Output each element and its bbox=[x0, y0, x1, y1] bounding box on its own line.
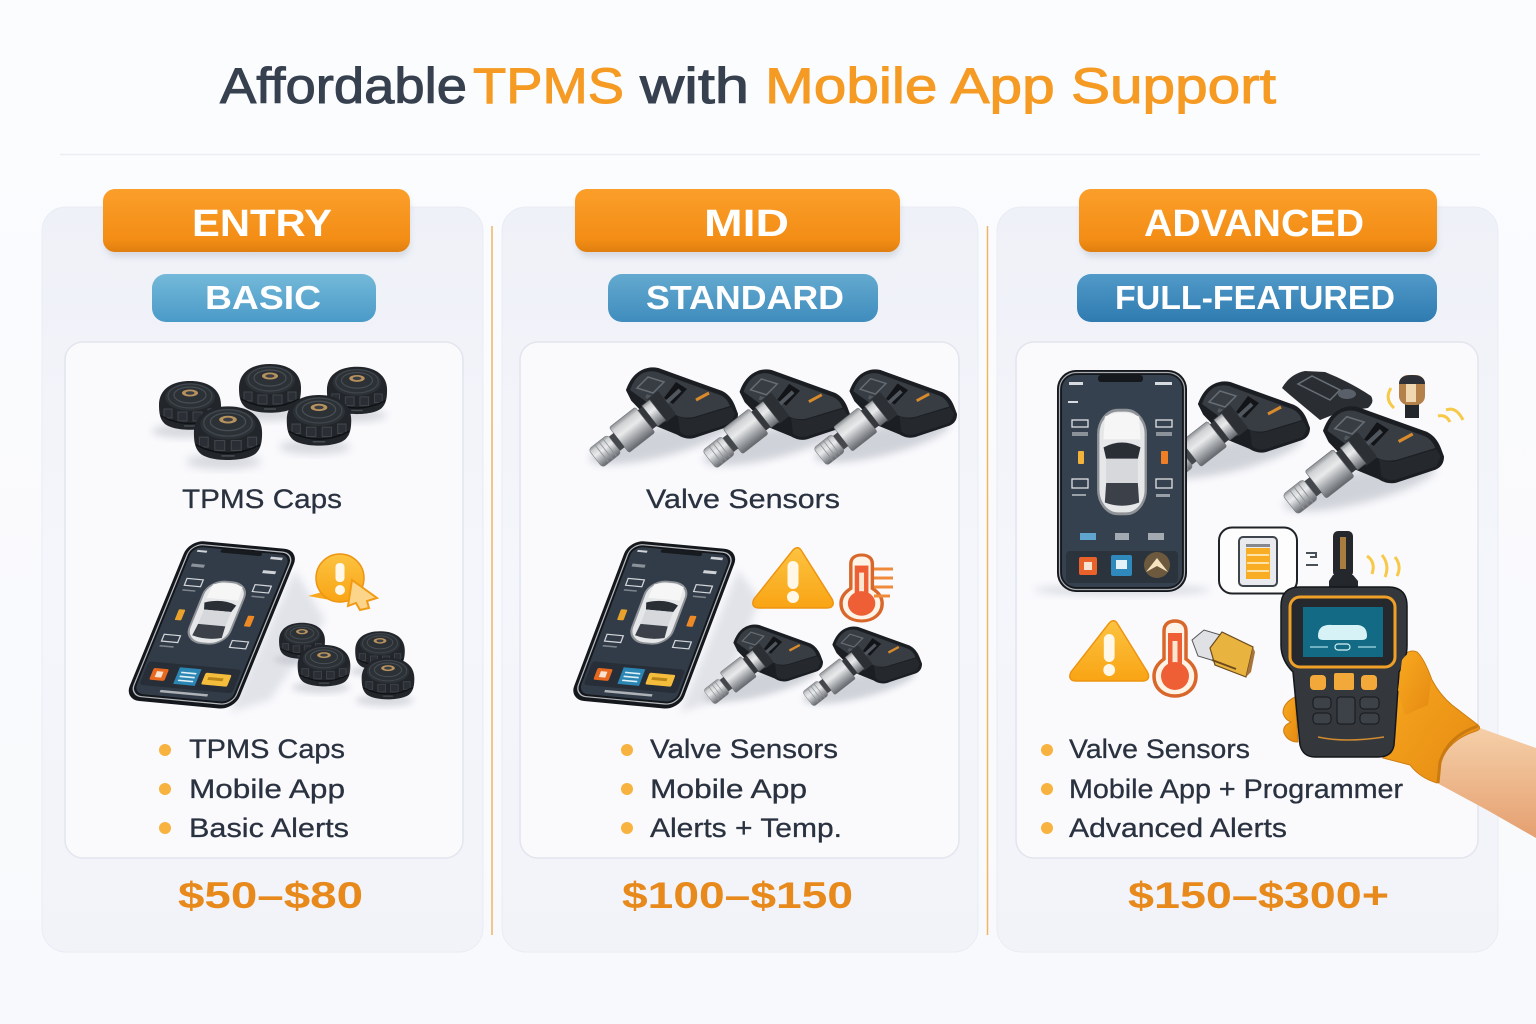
icon: valve sensors with signal bbox=[1158, 371, 1463, 521]
title: with bbox=[639, 58, 749, 114]
advanced header bbox=[1079, 189, 1437, 257]
card background bbox=[997, 207, 1498, 952]
feature list bbox=[621, 734, 842, 843]
feature list: Advanced Alerts bbox=[1069, 813, 1287, 843]
signal waves bbox=[1367, 555, 1399, 577]
icon: warning triangle bbox=[1070, 621, 1149, 681]
card background bbox=[42, 207, 483, 952]
panel: mid tier bbox=[502, 189, 978, 952]
inner panel bbox=[520, 342, 959, 858]
label: Valve Sensors: Valve Sensors bbox=[646, 484, 840, 514]
entry header: ENTRY bbox=[192, 203, 332, 245]
feature list: Basic Alerts bbox=[189, 813, 349, 843]
full-featured badge: FULL-FEATURED bbox=[1115, 279, 1395, 316]
icon: upright phone with app bbox=[1034, 370, 1210, 596]
icon: TPMS caps group bbox=[152, 364, 387, 469]
title: Mobile App Support bbox=[765, 58, 1276, 114]
inner panel bbox=[65, 342, 463, 858]
icon: thermometer bbox=[1154, 621, 1196, 696]
mid header bbox=[575, 189, 900, 257]
title bbox=[220, 58, 1276, 114]
icon: valve sensors group bbox=[586, 368, 956, 475]
device orange buttons bbox=[1310, 673, 1377, 690]
icon: thermometer bbox=[841, 555, 893, 621]
entry header bbox=[103, 189, 410, 257]
icon: device card bbox=[1219, 528, 1318, 594]
arm bbox=[1437, 728, 1536, 838]
device keypad bbox=[1313, 697, 1379, 724]
basic badge bbox=[152, 274, 376, 322]
feature list: Mobile App + Programmer bbox=[1069, 774, 1403, 804]
feature list: Valve Sensors bbox=[650, 734, 838, 764]
device body bbox=[1281, 587, 1407, 757]
glove back bbox=[1383, 651, 1480, 783]
icon: small TPMS caps bbox=[274, 623, 414, 706]
icon: phone with app bbox=[124, 540, 325, 712]
icon: OBD plug bbox=[1192, 630, 1255, 677]
mid header: MID bbox=[704, 203, 789, 245]
panel: entry tier bbox=[42, 189, 483, 952]
antenna bbox=[1329, 531, 1358, 587]
icon: warning triangle bbox=[753, 548, 833, 608]
standard badge: STANDARD bbox=[646, 279, 844, 316]
panel: advanced tier bbox=[997, 189, 1536, 952]
glove fingers bbox=[1283, 697, 1298, 742]
icon: small valve sensors bbox=[701, 625, 921, 712]
price: $100–$150 bbox=[622, 875, 853, 916]
icon: alert bubble with cursor bbox=[308, 554, 377, 610]
feature list: Valve Sensors bbox=[1069, 734, 1250, 764]
standard badge bbox=[608, 274, 878, 322]
price: $50–$80 bbox=[178, 875, 363, 916]
glove thumb bbox=[1398, 652, 1431, 715]
inner panel bbox=[1016, 342, 1478, 858]
advanced header: ADVANCED bbox=[1144, 203, 1364, 245]
glove cuff bbox=[1438, 726, 1478, 783]
full-featured badge bbox=[1077, 274, 1437, 322]
basic badge: BASIC bbox=[205, 279, 321, 316]
device screen bbox=[1290, 597, 1395, 667]
icon: phone with app bbox=[569, 540, 760, 712]
feature list: TPMS Caps bbox=[189, 734, 345, 764]
label: TPMS Caps: TPMS Caps bbox=[182, 484, 342, 514]
feature list bbox=[1041, 734, 1403, 843]
feature list: Mobile App bbox=[189, 774, 345, 804]
feature list: Mobile App bbox=[650, 774, 807, 804]
icon: TPMS programmer in gloved hand bbox=[1281, 531, 1536, 838]
title: TPMS bbox=[473, 58, 624, 114]
feature list bbox=[159, 734, 349, 843]
feature list: Alerts + Temp. bbox=[650, 813, 842, 843]
card background bbox=[502, 207, 978, 952]
title: Affordable bbox=[220, 58, 467, 114]
price: $150–$300+ bbox=[1128, 875, 1389, 916]
